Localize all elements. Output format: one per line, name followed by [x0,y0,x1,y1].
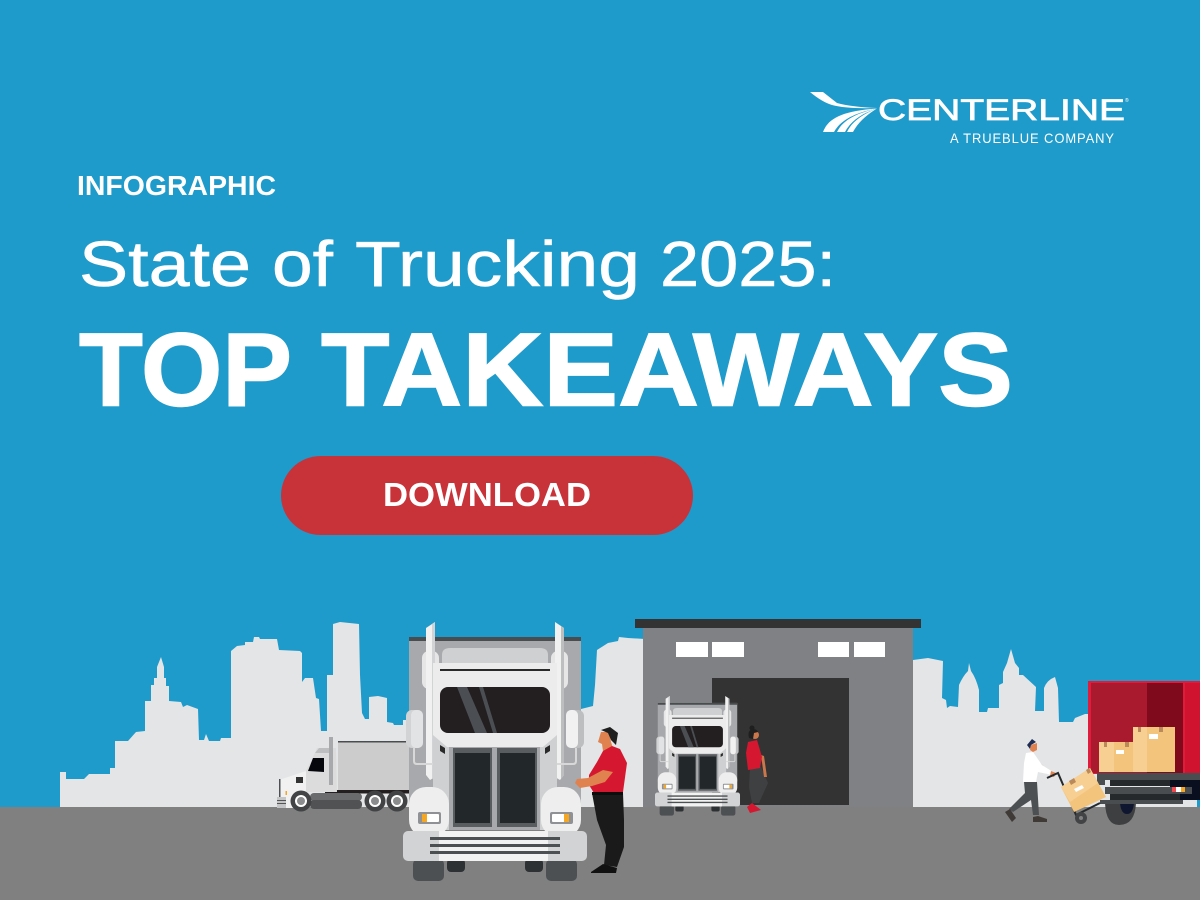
icon: road swoosh [810,92,877,132]
download button [281,456,693,535]
warehouse door [712,678,849,805]
warehouse [635,619,921,807]
title line 1: Trucking [355,228,640,300]
worker with hand truck [1005,739,1106,824]
cargo boxes [1099,727,1175,772]
download button: DOWNLOAD [383,476,591,513]
woman in red top [746,726,768,813]
title line 2 [79,312,1013,428]
eyebrow label: INFOGRAPHIC [77,170,276,201]
small front-view truck by warehouse [655,696,740,816]
logo wordmark: CENTERLINE [878,94,1125,127]
logo tagline: A TRUEBLUE COMPANY [950,130,1115,146]
title line 1: 2025: [660,228,836,300]
title line 1: of [272,228,333,300]
side-view truck [277,737,410,812]
logo registered mark: ® [1125,97,1129,104]
large front-view truck [403,622,587,881]
title line 2: TAKEAWAYS [321,312,1013,428]
tilted box [1061,768,1106,812]
hand truck [1047,773,1100,815]
title line 1: State [79,228,251,300]
warehouse windows [676,642,885,657]
ground [0,807,1200,900]
truck chassis [1105,803,1136,825]
city skyline [60,622,1197,807]
delivery box truck [1088,681,1200,825]
title line 2: TOP [79,312,292,428]
title line 1 [79,228,836,300]
driver in red shirt [575,727,627,873]
logo: Centerline [810,92,1129,146]
